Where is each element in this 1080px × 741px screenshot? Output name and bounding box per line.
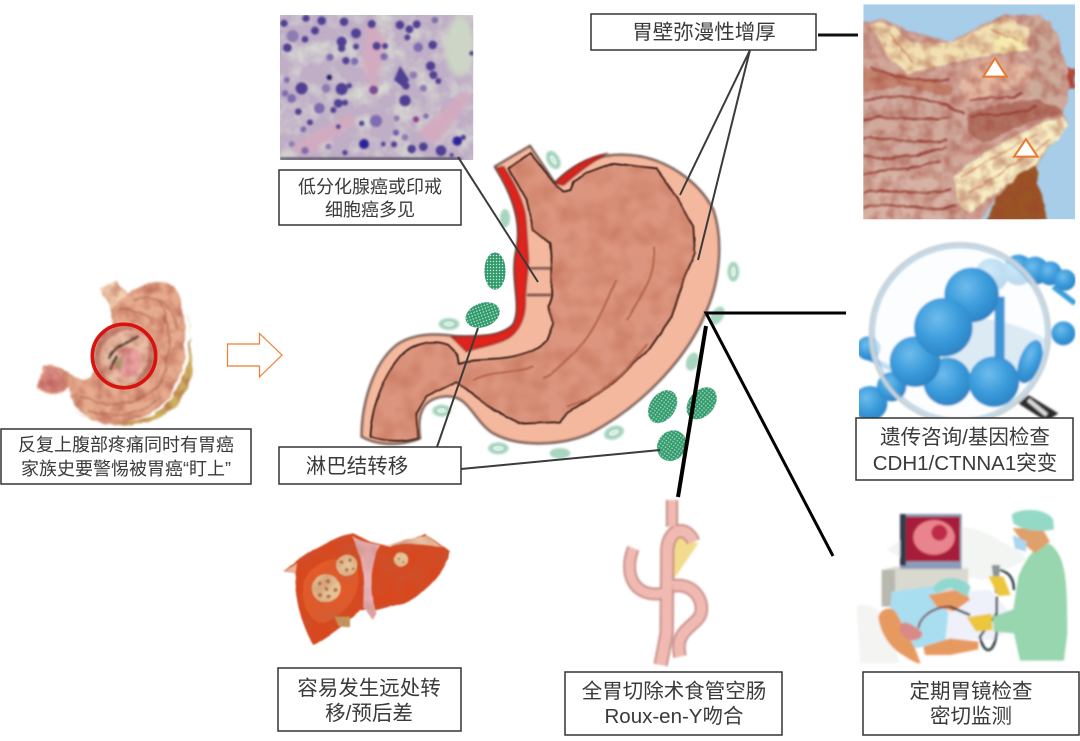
lymph nodes — [432, 148, 739, 467]
box: surgery: Roux-en-Y吻合 — [604, 705, 744, 728]
stomach outer wall — [362, 146, 719, 444]
wall layer ticks — [527, 268, 552, 295]
box: symptom warning: 反复上腹部疼痛同时有胃癌 — [18, 435, 234, 455]
arrow: orange outline pointing right — [228, 334, 282, 377]
image: DNA under magnifying glass — [853, 244, 1076, 423]
image: endoscopy procedure — [857, 510, 1067, 663]
box: surgery — [565, 672, 782, 735]
box: symptom warning: 家族史要警惕被胃癌“盯上” — [21, 459, 231, 479]
box: histology type: 低分化腺癌或印戒 — [298, 177, 442, 197]
box: distant metastasis: 容易发生远处转 — [297, 677, 441, 700]
box: genetic counselling — [856, 418, 1073, 480]
box: genetic counselling: 遗传咨询/基因检查 — [880, 426, 1050, 449]
box: diffuse wall thickening — [591, 14, 816, 50]
image: gross specimen photo — [857, 4, 1077, 227]
box: endoscopy surveillance: 定期胃镜检查 — [910, 680, 1032, 703]
leader lines — [437, 35, 858, 556]
markers: white triangles — [983, 58, 1038, 157]
stomach cross-section diagram — [362, 146, 739, 467]
gastric mucosa — [370, 153, 695, 441]
box: endoscopy surveillance — [863, 672, 1079, 735]
red fundus strip — [555, 153, 608, 185]
image: stomach with tumour circled — [37, 281, 193, 425]
box: genetic counselling: CDH1/CTNNA1突变 — [873, 452, 1057, 475]
image: Roux-en-Y reconstruction — [630, 500, 701, 665]
box: lymph node metastasis — [279, 447, 461, 484]
box: endoscopy surveillance: 密切监测 — [930, 705, 1012, 728]
box: surgery: 全胃切除术食管空肠 — [582, 680, 766, 703]
box: distant metastasis — [278, 668, 461, 731]
image: liver with metastases — [283, 533, 450, 645]
box: diffuse wall thickening: 胃壁弥漫性增厚 — [632, 21, 776, 44]
box: histology type: 细胞癌多见 — [325, 200, 415, 220]
box: symptom warning — [1, 429, 251, 484]
image: histology micrograph — [280, 15, 475, 160]
box: histology type — [279, 170, 461, 225]
box: lymph node metastasis: 淋巴结转移 — [306, 455, 408, 478]
red muscular layer — [452, 167, 528, 352]
box: distant metastasis: 移/预后差 — [325, 702, 413, 725]
